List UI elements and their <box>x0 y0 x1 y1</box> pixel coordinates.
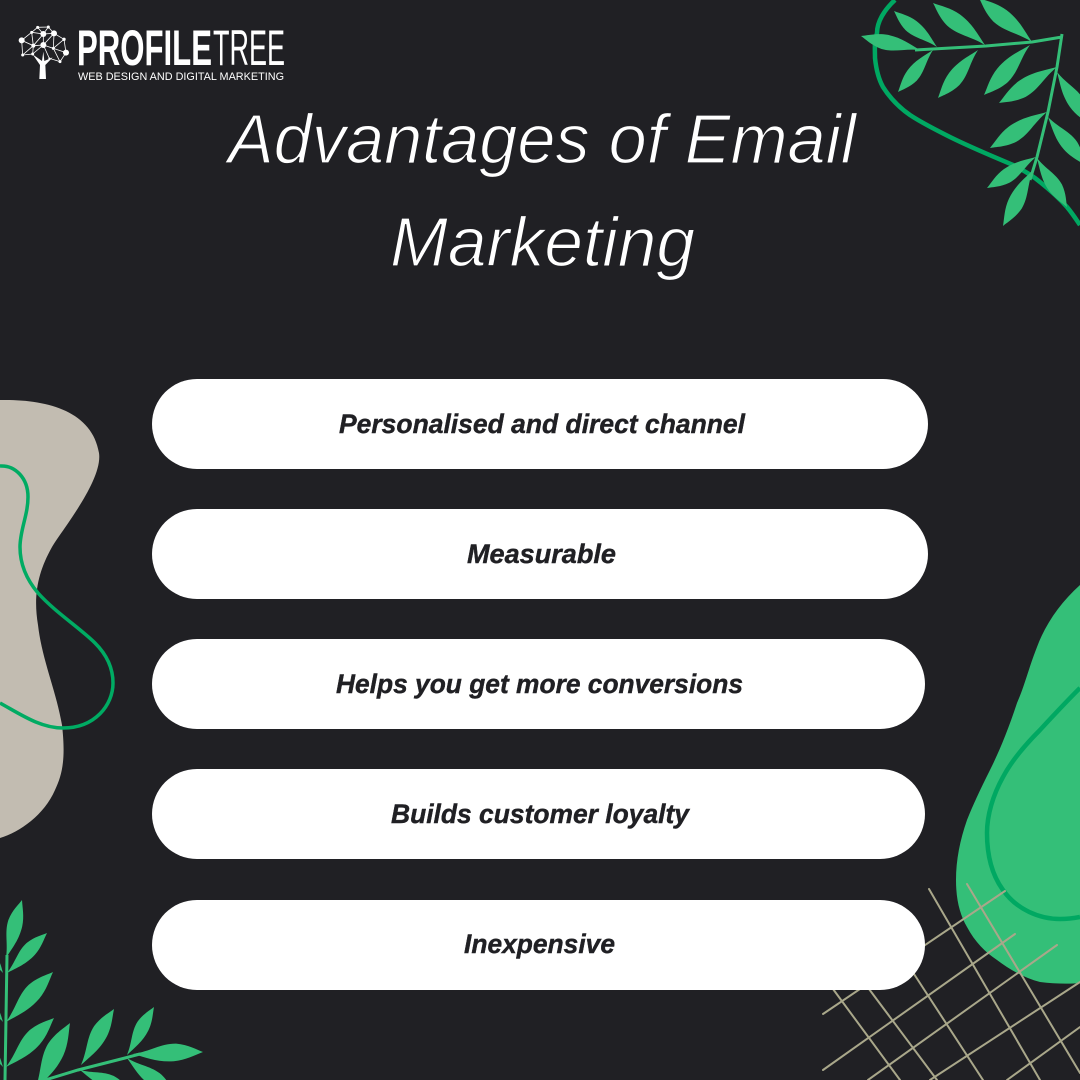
pill: helps you get more conversions: Helps you get more conversions <box>336 669 743 699</box>
pill: builds customer loyalty <box>152 769 925 859</box>
title: Marketing <box>390 203 695 281</box>
pill: inexpensive: Inexpensive <box>464 929 615 959</box>
icon: network tree <box>19 25 69 79</box>
hand-drawn grid lines, bottom right <box>823 884 1080 1080</box>
title: Advantages of Email <box>224 100 858 178</box>
title <box>224 100 858 281</box>
pill: helps you get more conversions <box>152 639 925 729</box>
leafy branch, top right <box>859 0 1080 230</box>
logo tagline: WEB DESIGN AND DIGITAL MARKETING <box>78 71 284 83</box>
leafy branches, bottom left <box>0 898 203 1080</box>
pill: personalised and direct channel: Personalised and direct channel <box>339 409 745 439</box>
logo wordmark: PROFILE <box>77 20 212 76</box>
pill: builds customer loyalty: Builds customer loyalty <box>391 799 691 829</box>
green blob with outline, right <box>956 585 1080 984</box>
pill: measurable <box>152 509 928 599</box>
pill: personalised and direct channel <box>152 379 928 469</box>
logo: ProfileTree <box>19 20 285 83</box>
logo wordmark light: TREE <box>213 20 285 76</box>
beige blob with green outline, left <box>0 400 113 838</box>
curved green line, top right <box>875 0 1080 225</box>
pill: measurable: Measurable <box>467 539 616 569</box>
pill: inexpensive <box>152 900 925 990</box>
